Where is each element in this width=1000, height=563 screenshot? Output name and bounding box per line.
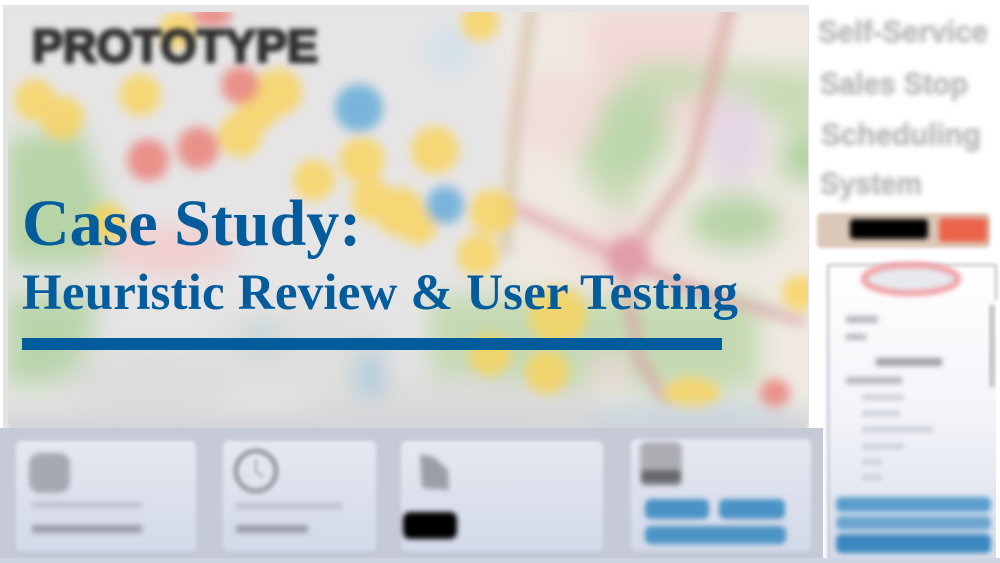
- title: Heuristic Review & User Testing: [22, 265, 738, 321]
- card: calendar / date: [16, 441, 196, 551]
- prototype watermark: PROTOTYPE: [32, 20, 318, 72]
- icon: calendar: [29, 453, 70, 493]
- sidebar redacted action bar: [817, 213, 990, 248]
- blurred list text: [846, 316, 942, 480]
- bottom toolbar background: [0, 428, 1000, 563]
- blurred labels: [32, 502, 142, 533]
- card: device with buttons: [631, 439, 811, 551]
- sidebar menu labels: System: [820, 166, 922, 201]
- sidebar menu labels: Sales Stop: [820, 66, 968, 101]
- card: clock / time: [223, 441, 376, 551]
- sidebar list panel: [828, 265, 996, 563]
- title: [22, 187, 738, 321]
- title: Case Study:: [22, 187, 361, 260]
- panel: blurred map: [3, 0, 831, 449]
- blue buttons: [645, 499, 786, 544]
- redacted block: [403, 512, 457, 539]
- blurred labels: [236, 503, 342, 533]
- icon: device: [640, 442, 682, 486]
- card: documents: [401, 441, 603, 551]
- icon: documents: [420, 454, 449, 490]
- icon: clock: [236, 451, 276, 491]
- sidebar menu labels: [818, 14, 988, 201]
- sidebar menu labels: Self-Service: [818, 14, 988, 49]
- title rule: [22, 338, 722, 350]
- sidebar menu labels: Scheduling: [821, 117, 981, 152]
- blue buttons: [836, 497, 991, 553]
- highlight circle: [864, 265, 958, 293]
